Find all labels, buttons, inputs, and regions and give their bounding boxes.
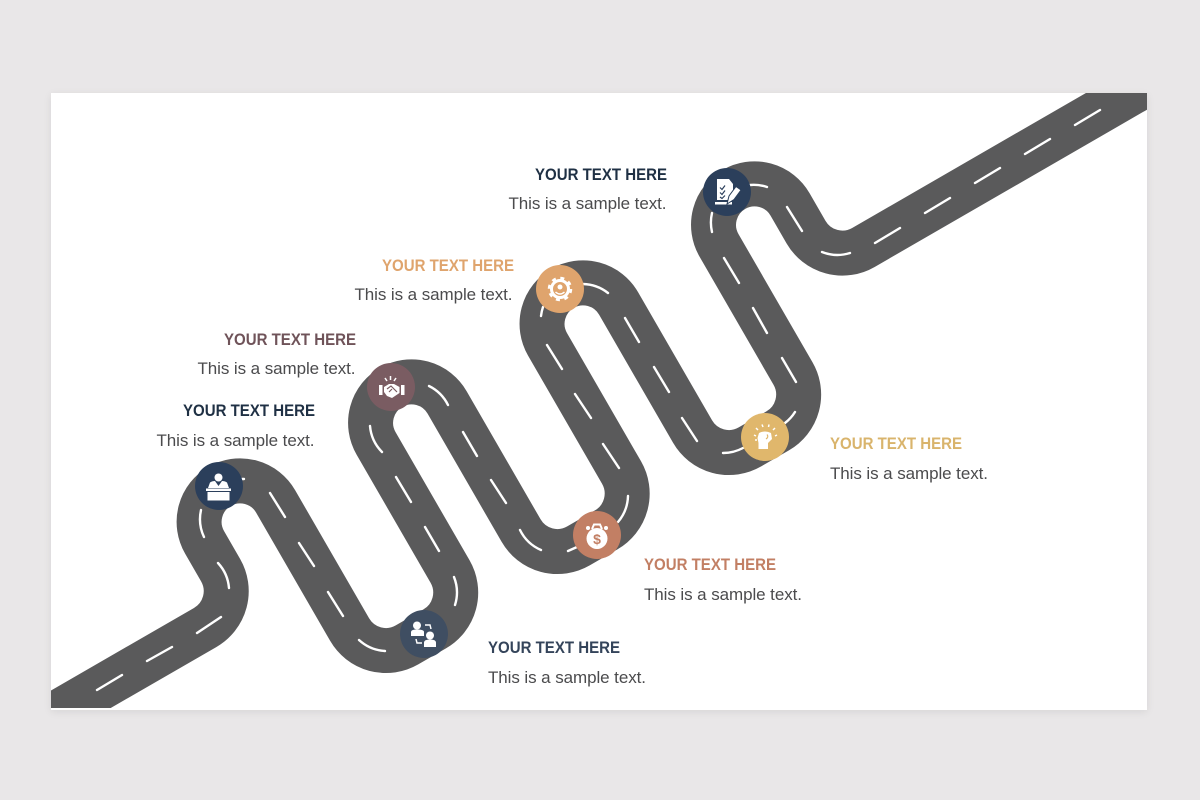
step 6: idea fist [741, 413, 789, 461]
label: step 7: This is a sample text. [508, 194, 666, 213]
label: step 6: This is a sample text. [830, 464, 988, 483]
label: step 3 [198, 331, 356, 378]
label: step 5: This is a sample text. [354, 285, 512, 304]
label: step 2: YOUR TEXT HERE [488, 639, 620, 657]
label: step 5 [354, 257, 514, 304]
label: step 5: YOUR TEXT HERE [382, 257, 514, 275]
label: step 6 [830, 435, 988, 483]
label: step 1: YOUR TEXT HERE [183, 402, 315, 420]
label: step 1: This is a sample text. [156, 431, 314, 450]
step 4: money bag timer [573, 511, 621, 559]
infographic canvas [51, 93, 1147, 708]
step 1: presenter at podium [195, 462, 243, 510]
step 7: checklist and pencil [703, 168, 751, 216]
label: step 2 [488, 639, 646, 687]
label: step 2: This is a sample text. [488, 668, 646, 687]
label: step 4: This is a sample text. [644, 585, 802, 604]
step 2: people exchange [400, 610, 448, 658]
step 5: gear with person [536, 265, 584, 313]
panel: white slide [51, 93, 1147, 710]
label: step 7: YOUR TEXT HERE [535, 166, 667, 184]
step 4: money bag timer: $ [593, 531, 601, 547]
label: step 4 [644, 556, 802, 604]
label: step 6: YOUR TEXT HERE [830, 435, 962, 453]
label: step 7 [508, 166, 667, 213]
label: step 3: YOUR TEXT HERE [224, 331, 356, 349]
label: step 4: YOUR TEXT HERE [644, 556, 776, 574]
label: step 3: This is a sample text. [198, 359, 356, 378]
step 3: handshake [367, 363, 415, 411]
winding road [51, 93, 1147, 708]
label: step 1 [156, 402, 315, 450]
